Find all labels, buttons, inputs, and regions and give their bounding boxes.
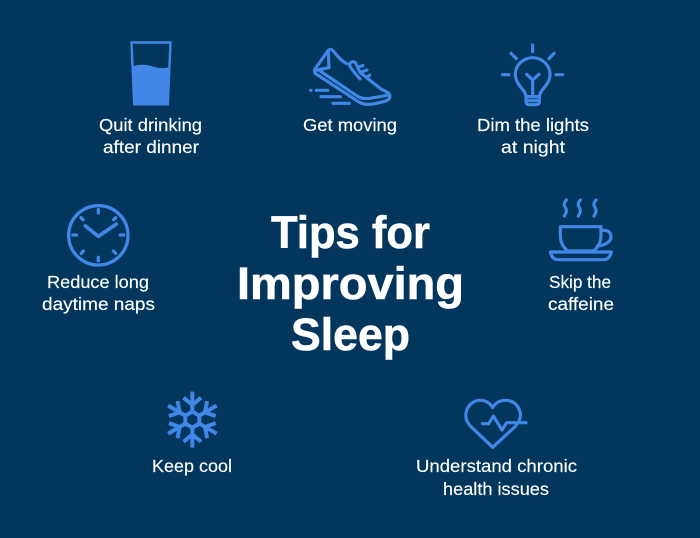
tip: understand chronic health issues: health issues <box>443 479 549 499</box>
label: Keep cool <box>152 456 232 476</box>
icon: coffee cup <box>550 200 611 260</box>
tip: skip the caffeine <box>548 200 614 314</box>
tip: skip the caffeine: caffeine <box>548 294 614 314</box>
icon: glass of water <box>132 42 170 104</box>
tip: quit drinking after dinner: after dinner <box>103 137 199 157</box>
tip: dim the lights at night: at night <box>501 137 565 157</box>
label: Reduce long <box>47 272 149 292</box>
tip: keep cool <box>152 392 232 476</box>
label: Quit drinking <box>99 115 202 135</box>
tip: reduce long daytime naps <box>42 206 155 314</box>
icon: clock <box>69 206 128 265</box>
title: Improving <box>237 258 464 309</box>
tip: reduce long daytime naps: daytime naps <box>42 294 155 314</box>
icon: running shoe <box>311 49 390 104</box>
tip: dim the lights at night <box>477 45 589 157</box>
icon: light bulb <box>502 45 563 105</box>
tip: quit drinking after dinner <box>99 42 202 157</box>
tip: understand chronic health issues <box>416 400 577 499</box>
label: Understand chronic <box>416 456 577 476</box>
label: Dim the lights <box>477 115 589 135</box>
icon: heart with pulse <box>466 400 526 447</box>
title: Tips for <box>271 207 430 258</box>
title: Sleep <box>291 309 410 360</box>
label: Get moving <box>303 115 397 135</box>
label: Skip the <box>549 272 611 292</box>
tip: get moving <box>303 49 397 135</box>
icon: snowflake <box>164 392 221 448</box>
title <box>237 207 464 360</box>
